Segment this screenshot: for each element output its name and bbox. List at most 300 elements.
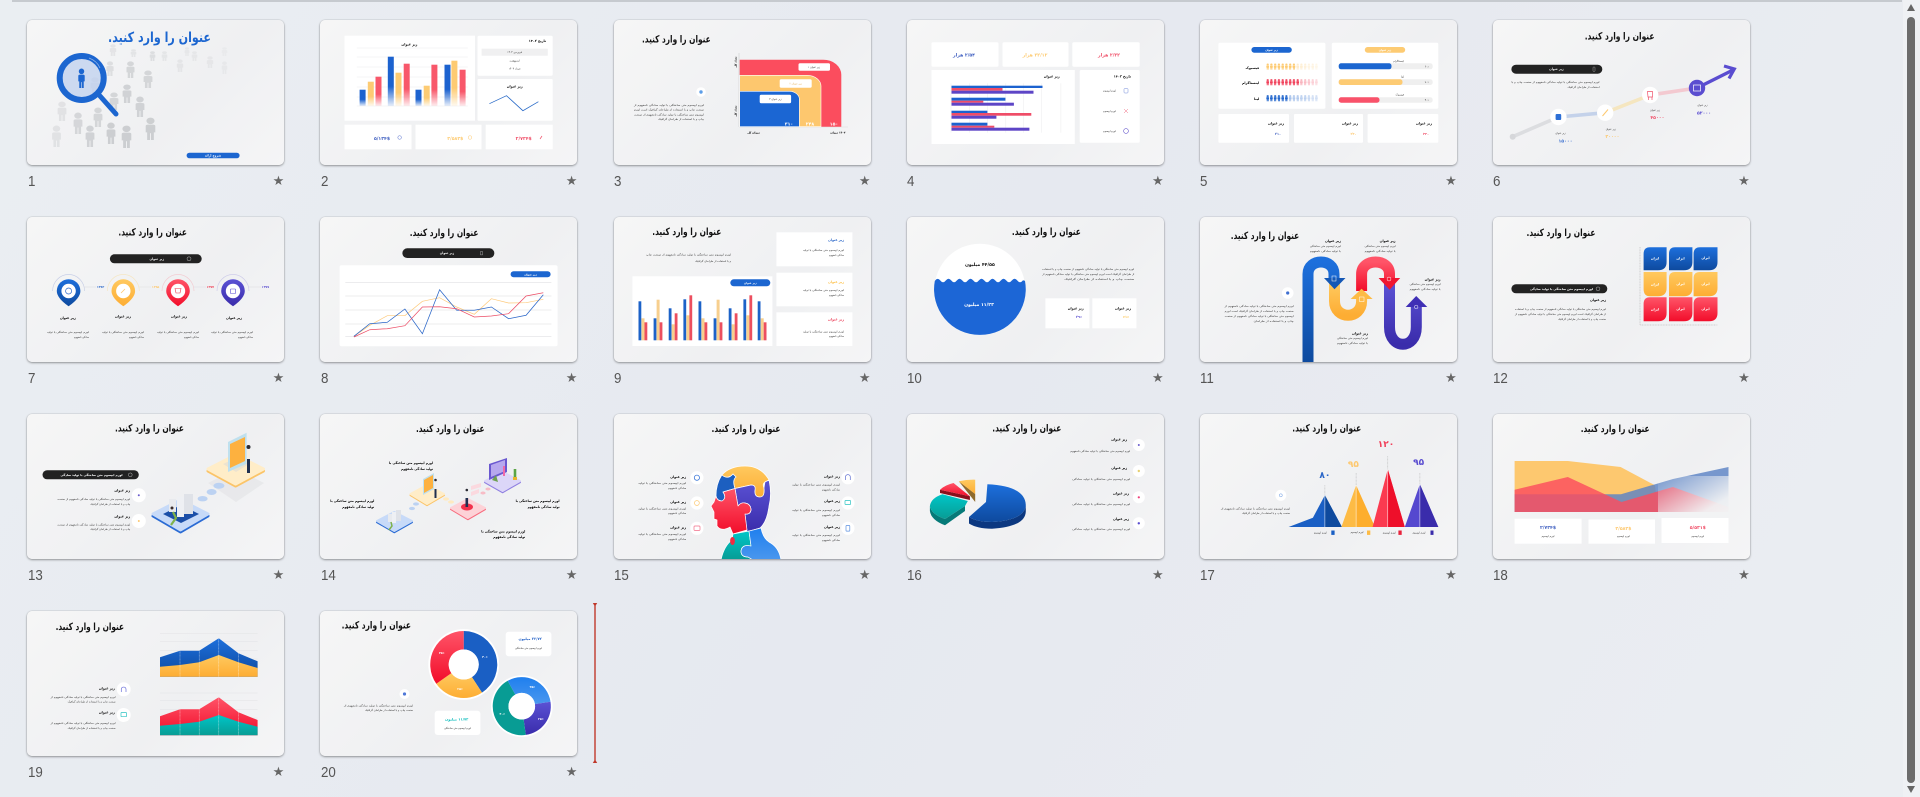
3D pie chart: [929, 479, 1025, 528]
caption 3: لورم ایپسوم متن ساختگی با تولید: [157, 330, 200, 334]
small donut: ۳۵٪: [530, 684, 536, 688]
title: عنوان را وارد کنید.: [992, 423, 1061, 434]
text block: از طراحان گرافیک است لورم ایپسوم متن ساختگی با تولید سادگی نامفهوم از: [1514, 312, 1606, 316]
stat card blue: ۲/۵۴ هزار: [952, 52, 975, 58]
text block: لورم ایپسوم متن ساختگی با تولید سادگی نامفهوم از: [1219, 506, 1290, 510]
panel: date list: تاریخ ۱۴۰۳: [529, 38, 546, 42]
bottom area chart: [160, 692, 258, 735]
stat card yellow: ۳۲/۱۲ هزار: [1021, 52, 1047, 58]
text item 2: صنعت چاپ و با استفاده از طراحان گرافیک: [68, 726, 116, 730]
label 1: لورم ایپسوم متن ساختگی: [1310, 244, 1341, 248]
title: عنوان را وارد کنید.: [652, 226, 721, 238]
title: عنوان را وارد کنید.: [711, 424, 780, 434]
right item 1: زیر عنوان: [824, 474, 840, 478]
text block: [1511, 80, 1600, 89]
legend item 3: زیر عنوان: [1113, 491, 1129, 495]
step icon purple: [1689, 79, 1705, 96]
pin red: ۱۴۹۷: [207, 284, 214, 288]
small donut: ۲۵٪: [538, 716, 544, 720]
pin purple: [217, 274, 270, 306]
icon: [400, 688, 410, 698]
slide 7: map pins: [27, 216, 284, 362]
value 95 purple: ۹۵: [1413, 458, 1424, 468]
stat card red: [1367, 114, 1438, 142]
panel: progress bars: [1331, 42, 1438, 108]
text item 2: [50, 710, 116, 730]
insertion marker: [592, 603, 598, 763]
panel: line chart: [340, 265, 558, 346]
slide 11 star: ★: [1445, 371, 1457, 386]
step label blue: ۱۵۰۰۰: [1558, 139, 1572, 144]
legend item 1: لورم ایپسوم متن ساختگی با تولید سادگی نامفهوم: [1070, 449, 1130, 453]
stat card yellow: ۳۴۰: [1350, 132, 1356, 136]
caption 3: سادگی نامفهوم: [184, 334, 199, 338]
slide 18 number: 18: [1493, 568, 1508, 584]
label 4: زیر عنوان: [1352, 331, 1368, 335]
text block: لورم ایپسوم متن ساختگی با تولید سادگی نامفهوم از صنعت چاپ و با استفاده: [1515, 307, 1606, 311]
pin yellow: [108, 274, 160, 306]
callout top: [506, 631, 552, 656]
small donut: ۴۰٪: [500, 712, 506, 716]
card blue: زیر عنوان: [828, 238, 844, 242]
stat card blue: زیر عنوان: [1268, 121, 1284, 125]
text block: استفاده از طراحان گرافیک: [1567, 85, 1600, 89]
icon 1: [132, 488, 146, 502]
stat card purple: ۳۹٪: [1076, 314, 1082, 318]
title: عنوان را وارد کنید.: [410, 228, 479, 238]
text item 1: لورم ایپسوم متن ساختگی با تولید سادگی نامفهوم از: [50, 694, 116, 698]
right item 1: سادگی نامفهوم: [822, 487, 840, 491]
chart: ۲۴۸: [805, 121, 814, 127]
legend: لورم ایپسوم: [1314, 531, 1327, 534]
slide 15: puzzle head: [614, 414, 870, 558]
slide 5: people and progress: [1200, 20, 1457, 164]
slide 9: bars with cards: [614, 216, 870, 362]
tile grid: ایران: [1651, 307, 1659, 311]
text block: لورم ایپسوم متن ساختگی با تولید سادگی نامفهوم از صنعت چاپ و با: [1511, 80, 1600, 84]
stat card red: ۲/۳۲ هزار: [1097, 52, 1120, 58]
panel: line chart: زیر عنوان: [507, 84, 523, 88]
subtitle pill: زیر عنوان: [440, 251, 455, 255]
pin red: [162, 274, 214, 306]
left item 1: زیر عنوان: [670, 474, 686, 478]
title: عنوان را وارد کنید.: [1230, 230, 1299, 242]
text block: چاپ و با استفاده از طراحان: [1253, 320, 1294, 323]
stat card blue: ۲/۷۳۴$: [1540, 524, 1556, 530]
panel: bar chart: زیر عنوان: [1043, 74, 1059, 78]
text item 2: زیر عنوان: [115, 514, 131, 518]
label 4: با تولید سادگی نامفهوم: [1337, 341, 1368, 345]
caption 4: زیر عنوان: [226, 316, 242, 320]
legend: لورم ایپسوم: [1382, 531, 1396, 534]
panel: date list: [1079, 70, 1139, 142]
stat card purple: [1045, 298, 1089, 328]
panel: progress bars: اینستاگرام: [1393, 58, 1404, 62]
text block: [1514, 298, 1606, 321]
panel: date list: لورم ایپسوم: [1103, 129, 1116, 132]
top area chart: [160, 633, 258, 676]
slide 7 star: ★: [273, 371, 284, 386]
text block d: لورم ایپسوم متن ساختگی با: [482, 529, 526, 533]
magnifier icon: [60, 56, 116, 114]
card red: [776, 312, 852, 346]
left item 1: [638, 471, 703, 490]
text block: لورم ایپسوم متن ساختگی با تولید سادگی نامفهوم از: [343, 703, 414, 707]
slide 12 number: 12: [1493, 371, 1508, 387]
text block a: لورم ایپسوم متن ساختگی با: [389, 460, 433, 464]
label 2: با تولید سادگی نامفهوم: [1364, 249, 1396, 253]
text block: و با استفاده از طراحان گرافیک: [694, 259, 731, 263]
panel: progress bars: ۶۰٪: [1424, 65, 1429, 68]
panel: progress bars: لینا: [1400, 75, 1404, 78]
label 1: با تولید سادگی نامفهوم: [1310, 249, 1341, 253]
text block: [1041, 267, 1134, 281]
step label purple: زیر عنوان: [1697, 104, 1708, 106]
stat card blue: [1218, 114, 1289, 142]
subtitle pill: [110, 254, 202, 263]
label 1: زیر عنوان: [1325, 238, 1341, 242]
legend item 4: زیر عنوان: [1113, 516, 1129, 520]
stat card blue: [1514, 518, 1581, 543]
card blue: [776, 232, 852, 266]
tile grid: ایران: [1701, 282, 1709, 286]
blue platform with buildings: [153, 494, 208, 532]
text item 1: [58, 488, 131, 506]
label 2: لورم ایپسوم متن ساختگی: [1364, 244, 1396, 248]
slide 20: donut charts: [320, 610, 577, 756]
text block c: [516, 498, 560, 508]
connector bubbles: [409, 487, 491, 510]
slide 10 number: 10: [907, 371, 922, 387]
right item 1: [792, 471, 854, 491]
axes: [1640, 246, 1717, 324]
slide 18: area chart: [1493, 414, 1750, 558]
pin blue: ۱۴۹۳: [97, 284, 105, 288]
slide 3 number: 3: [614, 174, 621, 190]
label 4: لورم ایپسوم متن ساختگی: [1337, 336, 1368, 340]
text block: صنعت چاپ و با استفاده از طراحان گرافیک: [365, 708, 413, 712]
legend item 2: زیر عنوان: [1111, 466, 1127, 470]
water level circle: [934, 243, 1025, 334]
tile grid: ایران: [1651, 256, 1659, 260]
slide 8 number: 8: [321, 371, 328, 387]
value 95 yellow: ۹۵: [1348, 459, 1359, 469]
title: عنوان را وارد کنید.: [1580, 424, 1649, 434]
stat card yellow: لورم ایپسوم: [1617, 535, 1630, 538]
step label blue: [1555, 132, 1572, 144]
step label blue: زیر عنوان: [1555, 132, 1566, 134]
title: عنوان را وارد کنید.: [1526, 228, 1595, 238]
caption 2: سادگی نامفهوم: [129, 334, 144, 338]
card red: زیر عنوان: [828, 317, 844, 321]
chart: زیر عنوان ۱: [807, 66, 820, 68]
slide 2 number: 2: [321, 174, 328, 190]
start button: شروع ارائه: [205, 153, 222, 157]
legend item 4: لورم ایپسوم متن ساختگی با تولید سادگی: [1072, 526, 1130, 530]
value 80: ۸۰: [1319, 470, 1330, 480]
text item 2: زیر عنوان: [99, 710, 115, 714]
legend item 1: [1070, 437, 1144, 453]
text block: زیر عنوان: [1590, 298, 1606, 302]
tile grid: ایران: [1676, 256, 1684, 260]
text block b: [331, 498, 375, 508]
title: عنوان را وارد کنید.: [108, 30, 211, 46]
caption 1: لورم ایپسوم متن ساختگی با تولید: [47, 330, 90, 334]
text block: [1223, 304, 1294, 323]
slide 15 star: ★: [859, 568, 871, 583]
panel: pictogram rows: [1218, 42, 1325, 108]
tile grid: ایران: [1651, 282, 1659, 286]
slide 2: dashboard: [320, 20, 577, 164]
slide 13 star: ★: [273, 568, 284, 583]
caption 3: [157, 314, 200, 338]
stat card red: زیر عنوان: [1416, 121, 1432, 125]
puzzle head: [710, 466, 780, 560]
panel: date list: خرداد ۱۴۰۳: [509, 67, 522, 70]
stat card red: [1072, 42, 1139, 66]
text item 1: لورم ایپسوم متن ساختگی با تولید سادگی نامفهوم از صنعت: [58, 497, 131, 501]
stat card red: [486, 124, 553, 149]
text block: [343, 703, 414, 712]
slide 14 number: 14: [321, 568, 335, 584]
caption 4: لورم ایپسوم متن ساختگی با تولید: [211, 330, 254, 334]
subtitle pill: [1511, 284, 1607, 293]
card red: سادگی نامفهوم: [828, 334, 844, 338]
slide 17: pyramids: [1200, 414, 1457, 558]
step label purple: ۵۲۰۰۰: [1697, 110, 1711, 116]
right item 3: [792, 521, 854, 542]
caption 2: زیر عنوان: [115, 314, 131, 318]
left item 2: سادگی نامفهوم: [668, 511, 686, 515]
panel: progress bars: ۴۰٪: [1424, 98, 1429, 102]
text item 2: [58, 514, 131, 531]
stat card yellow: [416, 124, 482, 149]
ribbon red: [1361, 262, 1400, 290]
left item 2: [638, 496, 703, 515]
text block c: لورم ایپسوم متن ساختگی با: [516, 498, 560, 502]
slide 16 number: 16: [907, 568, 922, 584]
legend item 3: لورم ایپسوم متن ساختگی با تولید سادگی: [1072, 502, 1130, 506]
callout bottom: ۱۱/۷۲ میلیون: [445, 717, 470, 721]
right item 1: لورم ایپسوم متن ساختگی با تولید: [792, 482, 840, 486]
yellow platform: [411, 472, 444, 505]
left item 1: لورم ایپسوم متن ساختگی با تولید: [638, 481, 686, 485]
caption 3: زیر عنوان: [171, 314, 187, 318]
legend: لورم ایپسوم: [1412, 531, 1425, 534]
panel: bar chart: [931, 70, 1074, 144]
triangle chart: [1288, 456, 1438, 526]
card red: لورم ایپسوم متن ساختگی با تولید: [802, 329, 844, 333]
red platform with person: [451, 482, 485, 519]
slide 10 star: ★: [1152, 371, 1164, 386]
card yellow: زیر عنوان: [828, 280, 844, 284]
label 3: لورم ایپسوم متن ساختگی: [1409, 282, 1441, 286]
panel: date list: لورم ایپسوم: [1103, 89, 1116, 92]
stat card red: لورم ایپسوم: [1691, 535, 1704, 538]
text block a: [389, 460, 433, 470]
title: عنوان را وارد کنید.: [115, 423, 184, 434]
slide 17 number: 17: [1200, 568, 1215, 584]
stat card red: [1661, 518, 1728, 542]
caption 4: سادگی نامفهوم: [238, 334, 253, 338]
subtitle pill: [1511, 64, 1602, 73]
area chart: [1514, 460, 1729, 518]
text item 1: [50, 686, 116, 703]
title: عنوان را وارد کنید.: [56, 622, 124, 632]
slide 18 star: ★: [1738, 568, 1750, 583]
slide 16 star: ★: [1152, 568, 1164, 583]
big donut: ۲۵٪: [458, 686, 463, 690]
legend item 4: [1072, 516, 1144, 530]
legend item 1: زیر عنوان: [1111, 437, 1127, 441]
caption 1: [47, 316, 90, 338]
slide 17 star: ★: [1445, 568, 1457, 583]
left item 1: سادگی نامفهوم: [668, 486, 686, 490]
panel: progress bars: فیسبوک: [1395, 92, 1404, 96]
card yellow: سادگی نامفهوم: [828, 292, 844, 296]
ribbon purple: [1389, 282, 1427, 344]
stat card blue: ۳۱۰: [1275, 132, 1281, 136]
pin purple: ۱۴۹۹: [262, 284, 270, 288]
step icon red: [1642, 86, 1658, 103]
label 3: زیر عنوان: [1424, 277, 1440, 281]
step label red: زیر عنوان: [1650, 108, 1661, 112]
caption 2: لورم ایپسوم متن ساختگی با تولید: [102, 330, 145, 334]
panel: date list: تاریخ ۱۴۰۳: [1113, 74, 1131, 78]
stat card yellow: ۳/۵۸۳$: [1615, 526, 1631, 532]
stat card red: ۲/۷۳۴$: [516, 136, 532, 142]
tile grid: ایران: [1701, 306, 1709, 310]
purple platform with screen: [485, 458, 520, 492]
right item 2: زیر عنوان: [824, 498, 840, 502]
label 1: [1310, 238, 1341, 253]
subtitle pill: [403, 248, 495, 258]
text block: لورم ایپسوم متن ساختگی با تولید سادگی نامفهوم از: [1223, 304, 1294, 308]
step label purple: [1697, 104, 1711, 116]
text item 1: صنعت چاپ و با استفاده از طراحان گرافیک: [68, 699, 116, 703]
left item 2: لورم ایپسوم متن ساختگی با تولید: [638, 506, 686, 510]
slide 15 number: 15: [614, 568, 629, 584]
text block d: [482, 529, 526, 538]
callout bottom: [435, 710, 481, 734]
text item 2: چاپ و با استفاده از طراحان گرافیک: [91, 527, 131, 531]
text item 2: لورم ایپسوم متن ساختگی با تولید سادگی نامفهوم از صنعت: [58, 522, 131, 526]
panel: pictogram rows: زیر عنوان: [1265, 48, 1278, 51]
chart: ۱۴۰۳ میزان: [830, 130, 845, 134]
chart: [734, 52, 848, 134]
step label red: ۴۵۰۰۰: [1650, 116, 1664, 120]
icon 2: [117, 708, 131, 722]
slide 12 star: ★: [1738, 371, 1750, 386]
label 3: [1409, 277, 1441, 291]
slide 13 number: 13: [28, 568, 42, 584]
card yellow: [776, 272, 852, 306]
caption 1: سادگی نامفهوم: [74, 334, 89, 338]
text block: ایپسوم متن ساختگی با تولید سادگی نامفهوم از صنعت: [1224, 314, 1294, 318]
slide 5 star: ★: [1445, 174, 1457, 189]
step label red: [1650, 108, 1664, 120]
card blue: لورم ایپسوم متن ساختگی با تولید: [802, 248, 844, 252]
right item 2: لورم ایپسوم متن ساختگی با تولید: [792, 508, 840, 512]
pin yellow: ۱۴۹۵: [152, 284, 160, 288]
value 120: ۱۲۰: [1377, 439, 1394, 449]
text block: صنعت چاپ و با استفاده از طراحان گرافیک است لورم: [1224, 309, 1293, 313]
stat card red: ۵/۵۳۱$: [1690, 524, 1706, 530]
stat card blue: [931, 42, 998, 66]
slide 8 star: ★: [566, 371, 577, 386]
tile grid: ایران: [1676, 306, 1684, 310]
chart: میزان کل: [747, 130, 760, 134]
caption 4: [211, 316, 254, 338]
title: عنوان را وارد کنید.: [342, 620, 411, 631]
panel: date list: فروردین ۱۴۰۳: [508, 50, 523, 54]
icon 1: [117, 682, 131, 696]
tile grid: [1643, 247, 1717, 321]
chart: ۱۵۰: [829, 122, 838, 127]
text block: صنعت چاپ و با استفاده از طراحان گرافیک: [1242, 511, 1290, 515]
panel: date list: اردیبهشت: [510, 59, 521, 62]
top toolbar edge: [12, 0, 1902, 2]
card blue: سادگی نامفهوم: [828, 253, 844, 257]
stat card blue: [345, 124, 412, 149]
water level circle: ۱۱/۲۳ میلیون: [964, 302, 994, 308]
left item 3: سادگی نامفهوم: [668, 537, 686, 541]
text item 1: چاپ و با استفاده از طراحان گرافیک: [91, 502, 131, 506]
panel: progress bars: ۷۰٪: [1424, 80, 1429, 84]
text block: [1219, 506, 1290, 515]
stat card purple: زیر عنوان: [1067, 306, 1083, 310]
slide 19: stacked area charts: [27, 610, 284, 756]
text block a: تولید سادگی نامفهوم: [401, 466, 433, 470]
yellow platform with board: [208, 432, 264, 502]
text item 1: زیر عنوان: [99, 686, 115, 690]
panel: date list: لورم ایپسوم: [1103, 109, 1116, 112]
big donut: [429, 629, 499, 699]
slide 14 star: ★: [566, 568, 577, 583]
text block: از طراحان گرافیک است لورم ایپسوم متن ساختگی با تولید سادگی نامفهوم از: [1041, 272, 1134, 276]
step icon blue: [1550, 108, 1566, 125]
text block: لورم ایپسوم متن ساختگی با تولید سادگی نامفهوم از صنعت چاپ و با استفاده: [1042, 267, 1134, 271]
stat card yellow: [1588, 519, 1655, 543]
subtitle pill: [43, 470, 139, 479]
callout top: ۳۲/۷۲ میلیون: [519, 636, 543, 640]
chart: تعداد کل: [734, 105, 737, 116]
text block d: تولید سادگی نامفهوم: [494, 534, 526, 538]
title: عنوان را وارد کنید.: [1292, 423, 1361, 434]
panel: bar chart: زیر عنوان: [744, 281, 757, 284]
slide 14: isometric journey: [320, 414, 577, 558]
left item 3: زیر عنوان: [670, 525, 686, 529]
legend: [1314, 530, 1433, 534]
stat card yellow: ۳/۵۸۳$: [448, 136, 464, 142]
stat card yellow: ۶۱٪: [1123, 314, 1129, 318]
start button: [187, 152, 240, 158]
title: عنوان را وارد کنید.: [416, 424, 485, 434]
slide 20 number: 20: [321, 765, 335, 781]
slide 1: cover with magnifier: [27, 20, 284, 164]
stat card blue: ۵/۱۳۴$: [374, 136, 390, 142]
title: عنوان را وارد کنید.: [119, 227, 187, 238]
caption 2: [102, 314, 145, 338]
slide 13: isometric scene: [27, 414, 284, 558]
slide 1 star: ★: [273, 174, 284, 189]
panel: pictogram rows: اینستاگرام: [1242, 81, 1259, 85]
legend item 3: [1072, 491, 1144, 506]
stat card blue: لورم ایپسوم: [1541, 535, 1554, 538]
text block: [632, 102, 704, 121]
ribbon blue: [1308, 262, 1345, 362]
card yellow: لورم ایپسوم متن ساختگی با تولید: [802, 288, 844, 292]
